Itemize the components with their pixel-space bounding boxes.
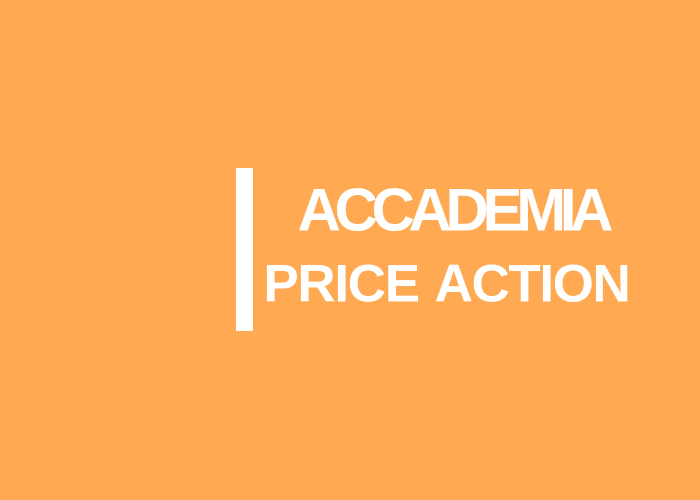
- title: ACCADEMIA: ACCADEMIA: [298, 177, 614, 244]
- title: PRICE ACTION: PRICE: [263, 255, 419, 314]
- title: PRICE ACTION: ACTION: [435, 255, 629, 314]
- vertical accent bar: [236, 168, 253, 331]
